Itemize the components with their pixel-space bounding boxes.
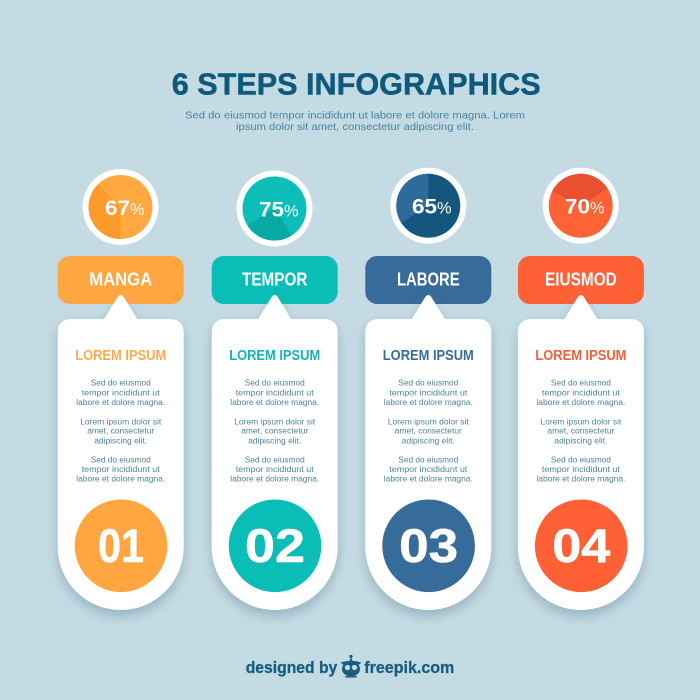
label bar labore — [365, 256, 491, 304]
card 2 body text: amet, consectetur — [241, 427, 309, 436]
card 2 body text: labore et dolore magna. — [230, 475, 319, 484]
card 2 body text: tempor incididunt ut — [236, 388, 315, 397]
number 01 — [75, 500, 167, 592]
footer credit: designed by — [246, 658, 338, 677]
pie badge 75%: % — [284, 202, 298, 220]
card 2 body text: adipiscing elit. — [248, 436, 301, 445]
card 4 body text: amet, consectetur — [547, 427, 615, 436]
pie badge 70%: % — [590, 199, 604, 218]
card 3 body text: Sed do eiusmod — [398, 456, 458, 465]
title: 6 STEPS INFOGRAPHICS — [172, 66, 541, 102]
label bar eiusmod — [518, 256, 644, 304]
number 04: 04 — [552, 519, 610, 572]
card 4 body text: Sed do eiusmod — [551, 456, 611, 465]
number 02: 02 — [245, 519, 305, 572]
card 2 heading: LOREM IPSUM — [229, 348, 320, 364]
panel: step 2 tempor — [212, 170, 338, 610]
card 2 body text: Lorem ipsum dolor sit — [234, 417, 316, 426]
pie badge 67%: % — [130, 200, 144, 219]
number 03 — [382, 500, 475, 592]
pie badge 67%: 67 — [105, 196, 130, 220]
label bar manga: MANGA — [89, 270, 152, 290]
card 1 body text: labore et dolore magna. — [76, 398, 165, 407]
card 1 body text: labore et dolore magna. — [76, 475, 165, 484]
card 3 body text: tempor incididunt ut — [389, 465, 468, 474]
card 4 body text: adipiscing elit. — [554, 436, 607, 445]
card 2 body text: Sed do eiusmod — [245, 456, 305, 465]
panel: step 4 eiusmod — [518, 168, 644, 610]
number 03: 03 — [399, 519, 458, 572]
card 2 — [212, 295, 338, 610]
card 3 body text: Lorem ipsum dolor sit — [388, 417, 470, 426]
card 1 body text: tempor incididunt ut — [82, 388, 161, 397]
card 3 heading: LOREM IPSUM — [383, 348, 474, 364]
label bar eiusmod: EIUSMOD — [545, 270, 617, 290]
pie badge 75% — [236, 170, 312, 246]
card 3 body text: Sed do eiusmod — [398, 379, 458, 388]
card 1 body text: Lorem ipsum dolor sit — [80, 417, 162, 426]
card 4 body text: labore et dolore magna. — [536, 475, 625, 484]
label bar manga — [58, 256, 184, 304]
card 2 body text: Sed do eiusmod — [245, 379, 305, 388]
pie badge 70%: 70 — [565, 195, 590, 219]
pie badge 65%: % — [437, 199, 452, 218]
card 1 body text: Sed do eiusmod — [91, 379, 151, 388]
card 2 body text — [230, 379, 319, 484]
card 1 body text: Sed do eiusmod — [91, 456, 151, 465]
card 1 body text: tempor incididunt ut — [82, 465, 161, 474]
label bar labore: LABORE — [397, 270, 460, 290]
pie badge 65% — [390, 168, 466, 244]
card 4 body text — [536, 379, 625, 484]
subtitle: ipsum dolor sit amet, consectetur adipiscing elit. — [236, 121, 474, 133]
panel: step 1 manga — [58, 169, 184, 610]
card 3 body text: adipiscing elit. — [402, 436, 455, 445]
label bar tempor — [212, 256, 338, 304]
number 02 — [229, 500, 321, 592]
card 4 body text: tempor incididunt ut — [542, 388, 621, 397]
pie badge 70% — [543, 168, 619, 244]
icon: freepik mascot — [340, 655, 362, 678]
subtitle — [185, 110, 525, 133]
card 3 body text: labore et dolore magna. — [384, 475, 473, 484]
card 2 body text: tempor incididunt ut — [236, 465, 315, 474]
card 3 body text: labore et dolore magna. — [384, 398, 473, 407]
subtitle: Sed do eiusmod tempor incididunt ut labore et dolore magna. Lorem — [185, 110, 525, 122]
card 4 — [518, 295, 644, 610]
card 4 body text: labore et dolore magna. — [536, 398, 625, 407]
card 1 body text — [76, 379, 165, 484]
card 4 body text: tempor incididunt ut — [542, 465, 621, 474]
card 1 body text: amet, consectetur — [87, 427, 155, 436]
card 3 body text — [384, 379, 473, 484]
panel: step 3 labore — [365, 168, 491, 610]
pie badge 65%: 65 — [412, 195, 437, 219]
card 1 heading: LOREM IPSUM — [75, 348, 166, 364]
card 4 heading: LOREM IPSUM — [535, 348, 626, 364]
pie badge 67% — [82, 169, 158, 245]
footer credit: freepik.com — [364, 658, 454, 677]
number 04 — [535, 500, 628, 592]
card 4 body text: Sed do eiusmod — [551, 379, 611, 388]
card 3 body text: amet, consectetur — [395, 427, 462, 436]
card 1 body text: adipiscing elit. — [94, 436, 147, 445]
pie badge 75%: 75 — [259, 198, 284, 222]
card 2 body text: labore et dolore magna. — [230, 398, 319, 407]
label bar tempor: TEMPOR — [242, 270, 307, 290]
card 1 — [58, 295, 184, 610]
card 3 — [365, 295, 491, 610]
footer credit — [246, 655, 454, 678]
card 4 body text: Lorem ipsum dolor sit — [540, 417, 622, 426]
card 3 body text: tempor incididunt ut — [389, 388, 468, 397]
number 01: 01 — [98, 519, 144, 572]
